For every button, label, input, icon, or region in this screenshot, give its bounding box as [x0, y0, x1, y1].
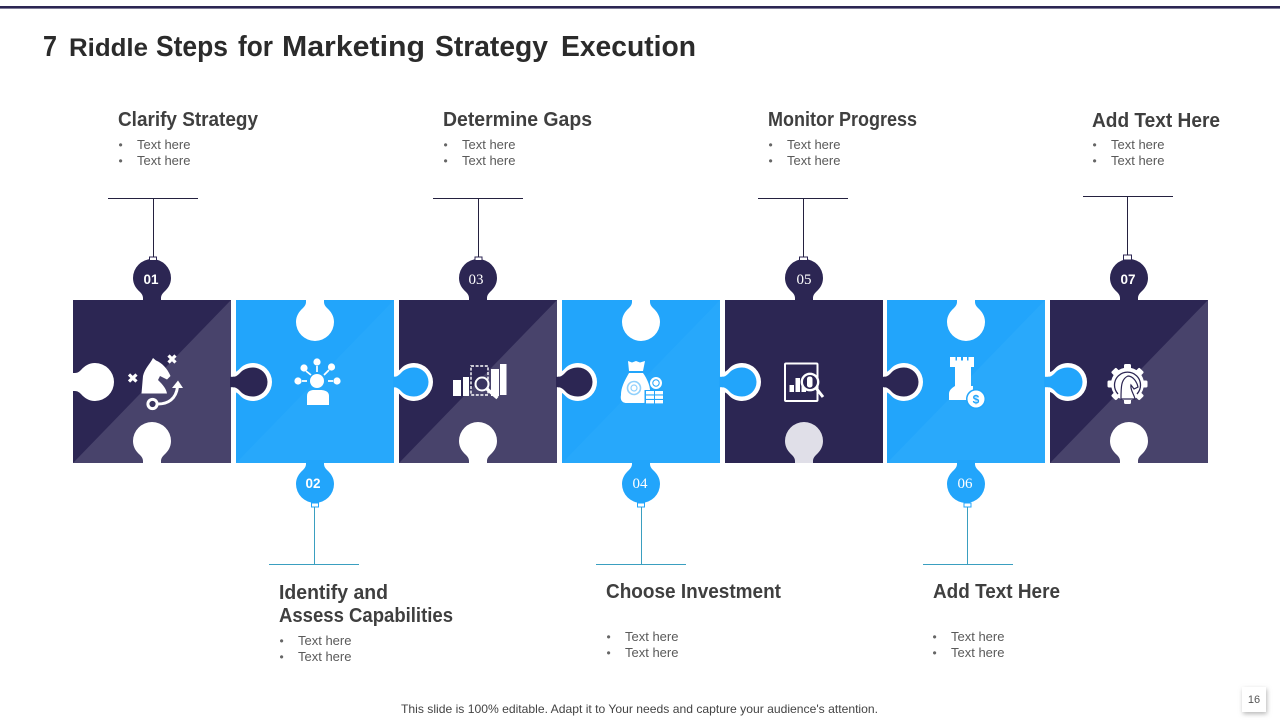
piece 04 body — [562, 300, 720, 463]
piece 05 top tab: 05 — [796, 272, 812, 288]
piece 06 notches — [880, 298, 985, 401]
callout 04: Choose Investment — [596, 507, 781, 660]
bullet list — [768, 137, 840, 168]
callout 07: Add Text Here — [1083, 110, 1220, 255]
icon: person with network nodes — [294, 358, 341, 405]
bullet list — [444, 137, 515, 168]
leader line 02 — [269, 507, 359, 564]
piece 06 bottom tab — [947, 460, 985, 507]
footer note: This slide is 100% editable. Adapt it to Your needs and capture your audience's attention. — [401, 702, 878, 716]
piece 04 notches — [554, 298, 660, 401]
piece 06 bottom tab: 06 — [958, 476, 973, 492]
piece 05 top tab — [785, 257, 823, 302]
bullet list: • — [606, 646, 611, 660]
piece 03 top tab — [459, 257, 497, 302]
puzzle piece 01 — [71, 257, 268, 465]
piece 06 outgoing tab — [1044, 368, 1082, 396]
title: Strategy — [435, 31, 548, 63]
icon: bar chart with magnifier — [453, 364, 506, 398]
callout 01: Clarify Strategy — [108, 109, 259, 257]
icon: chess knight strategy — [129, 356, 183, 409]
heading: Assess Capabilities — [279, 605, 453, 627]
bullet list: • — [932, 646, 937, 660]
bullet list: Text here — [1111, 137, 1164, 152]
callout 03: Determine Gaps — [433, 109, 592, 257]
piece 05 body — [725, 300, 883, 463]
piece 01 outgoing tab — [230, 368, 268, 396]
heading: Add Text Here — [933, 581, 1060, 603]
bullet list: Text here — [1111, 153, 1164, 168]
piece 02 body — [236, 300, 394, 463]
piece 06 body — [887, 300, 1045, 463]
bullet list: • — [118, 138, 123, 152]
callout 02: Identify and Assess Capabilities — [269, 507, 453, 664]
piece 07 notches — [1044, 363, 1148, 465]
top accent bar — [0, 6, 1280, 9]
bullet list: Text here — [462, 137, 515, 152]
bullet list: • — [444, 154, 448, 168]
piece 03 top tab: 03 — [468, 272, 484, 288]
page number: 16 — [1248, 694, 1260, 706]
piece 02 bottom tab: 02 — [305, 476, 321, 491]
bullet list: Text here — [137, 137, 190, 152]
bullet list: Text here — [787, 153, 840, 168]
bullet list: • — [768, 138, 773, 152]
bullet list: • — [1092, 154, 1097, 168]
piece 04 bottom tab — [622, 460, 660, 507]
bullet list: • — [444, 138, 448, 152]
leader line 01 — [108, 198, 198, 257]
bullet list — [118, 137, 190, 168]
title: Marketing — [282, 31, 425, 63]
piece 07 body — [1050, 300, 1208, 463]
piece 03 outgoing tab — [556, 368, 592, 396]
bullet list: • — [932, 630, 937, 644]
bullet list: Text here — [625, 629, 678, 644]
heading: Choose Investment — [606, 581, 781, 603]
piece 04 outgoing tab — [719, 368, 756, 396]
bullet list — [1092, 137, 1164, 168]
title: for — [238, 31, 273, 63]
bullet list: Text here — [951, 629, 1004, 644]
heading: Add Text Here — [1092, 110, 1220, 132]
piece 03 notches — [390, 363, 497, 465]
heading — [279, 582, 453, 627]
bullet list: Text here — [298, 649, 351, 664]
piece 02 bottom tab — [296, 460, 334, 507]
title: Riddle — [69, 34, 148, 62]
icon: rook with dollar coin: $ — [973, 392, 980, 406]
piece 01 top tab — [133, 257, 171, 302]
bullet list: • — [606, 630, 611, 644]
callout 05: Monitor Progress — [758, 109, 917, 257]
piece 07 top tab — [1110, 255, 1148, 302]
callout 06: Add Text Here — [923, 507, 1060, 660]
icon: gear with knight — [1108, 364, 1148, 404]
heading: Monitor Progress — [768, 109, 917, 131]
leader line 03 — [433, 198, 523, 257]
puzzle piece 07 — [1044, 255, 1208, 465]
bullet list — [606, 629, 678, 660]
bullet list: Text here — [462, 153, 515, 168]
heading: Clarify Strategy — [118, 109, 259, 131]
heading: Identify and — [279, 582, 388, 604]
icon: report with magnifier — [785, 364, 823, 401]
piece 01 top tab: 01 — [143, 272, 159, 287]
icon: money bag and coins — [621, 361, 664, 404]
bullet list: • — [280, 650, 284, 664]
puzzle piece 05 — [718, 257, 918, 466]
bullet list: • — [768, 154, 773, 168]
bullet list: • — [118, 154, 123, 168]
bullet list: • — [1092, 138, 1097, 152]
bullet list: Text here — [137, 153, 190, 168]
leader line 04 — [596, 507, 686, 564]
heading: Determine Gaps — [443, 109, 592, 131]
page number — [1242, 687, 1266, 712]
piece 03 body — [399, 300, 557, 463]
piece 01 body — [73, 300, 231, 463]
title: 7 — [43, 31, 57, 63]
bullet list — [280, 633, 351, 664]
leader line 06 — [923, 507, 1013, 564]
piece 01 notches — [71, 363, 171, 465]
piece 05 outgoing tab — [882, 368, 918, 396]
puzzle piece 03 — [390, 257, 592, 465]
piece 05 notches — [718, 363, 823, 466]
puzzle piece 04 — [554, 298, 756, 507]
title — [43, 31, 696, 63]
bullet list: Text here — [625, 645, 678, 660]
leader line 05 — [758, 198, 848, 257]
title: Execution — [561, 31, 696, 63]
icon: rook with dollar coin — [949, 357, 986, 409]
title: Steps — [156, 31, 228, 63]
bullet list: Text here — [298, 633, 351, 648]
piece 04 bottom tab: 04 — [632, 476, 648, 492]
leader line 07 — [1083, 196, 1173, 255]
puzzle piece 06 — [880, 298, 1082, 507]
piece 07 top tab: 07 — [1120, 272, 1136, 287]
bullet list: Text here — [951, 645, 1004, 660]
piece 02 outgoing tab — [393, 368, 428, 396]
bullet list: Text here — [787, 137, 840, 152]
puzzle piece 02 — [229, 298, 428, 507]
piece 02 notches — [229, 298, 334, 401]
bullet list: • — [280, 634, 284, 648]
bullet list — [932, 629, 1004, 660]
